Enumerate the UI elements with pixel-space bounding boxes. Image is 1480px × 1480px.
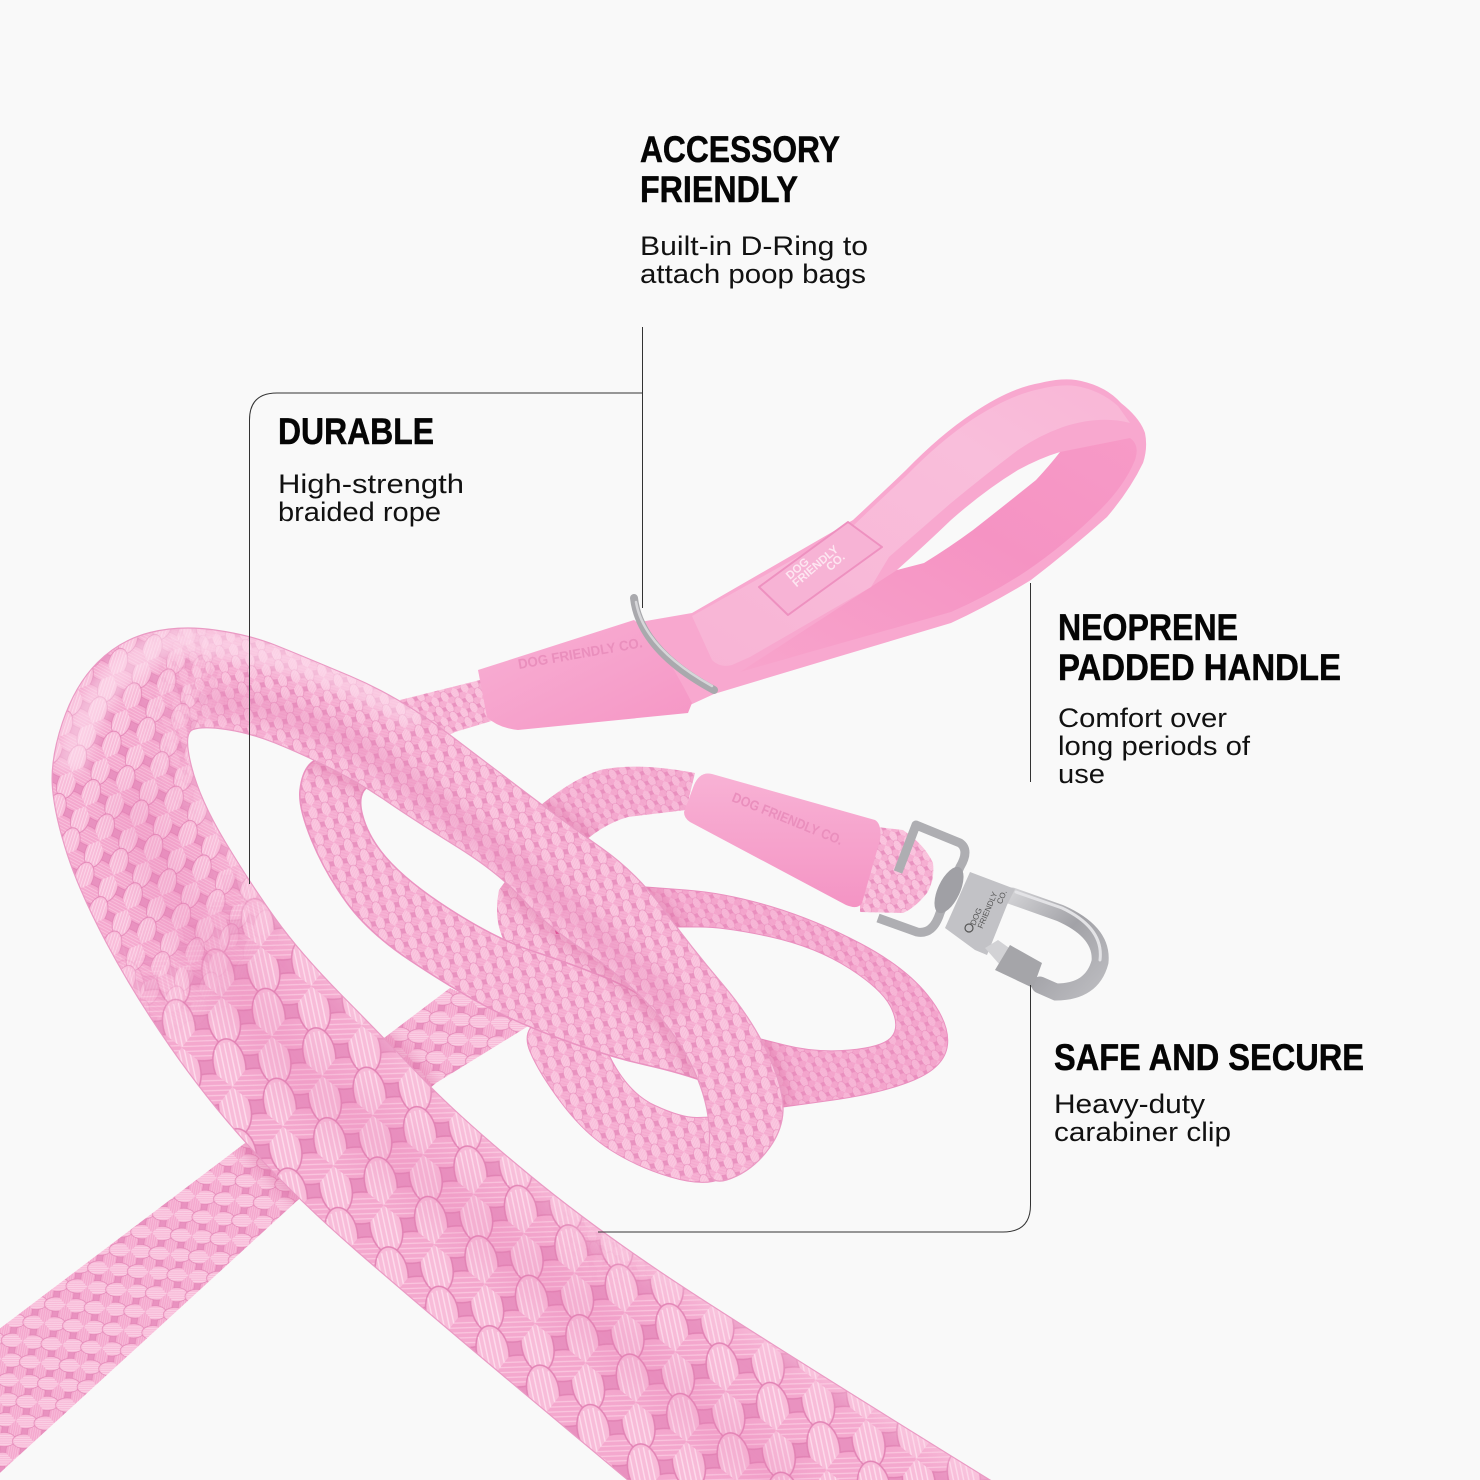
- text block: accessory friendly: [640, 129, 868, 289]
- text block: neoprene padded handle: Comfort over: [1058, 703, 1227, 733]
- collar: handle side sleeve: DOG FRIENDLY CO.: [517, 634, 644, 672]
- handle: brand patch: [759, 522, 882, 615]
- leash illustration: [0, 379, 1146, 1480]
- rope: front ring: [300, 756, 750, 1095]
- clip: swivel loop: [878, 825, 965, 932]
- rope: rear ring: [646, 887, 948, 1110]
- D-ring: [634, 598, 714, 690]
- heading: ACCESSORY: [640, 129, 840, 170]
- heading: DURABLE: [278, 411, 434, 452]
- collar: clip side sleeve: [684, 773, 880, 907]
- collar: rope end near clip: [860, 825, 933, 913]
- text block: accessory friendly: attach poop bags: [640, 259, 866, 289]
- rope: near collar: [535, 767, 695, 850]
- text block: durable: braided rope: [278, 497, 441, 527]
- clip: hook: [1012, 892, 1100, 992]
- text block: accessory friendly: Built-in D-Ring to: [640, 231, 868, 261]
- text block: neoprene padded handle: use: [1058, 759, 1105, 789]
- heading: NEOPRENE: [1058, 607, 1238, 648]
- text block: accessory friendly: FRIENDLY: [640, 169, 798, 210]
- text block: durable: High-strength: [278, 469, 464, 499]
- clip: swivel barrel: [928, 863, 970, 917]
- text block: neoprene padded handle: PADDED HANDLE: [1058, 647, 1341, 688]
- rope: handle side stub: [400, 680, 495, 745]
- handle: brand patch: CO.: [824, 551, 848, 574]
- rope: lower-left strand: [0, 988, 530, 1480]
- collar: clip side sleeve: DOG FRIENDLY CO.: [730, 789, 845, 848]
- rope: contact shadow under the main strand: [237, 761, 794, 1207]
- carabiner clip: CO.: [995, 889, 1009, 905]
- handle: lower strap: [740, 438, 1137, 672]
- rope: main thick strand: [52, 627, 991, 1480]
- clip: body: [945, 872, 1015, 955]
- handle: silhouette and rim: [640, 379, 1146, 705]
- handle: grip opening: [897, 452, 1060, 570]
- clip: lock sleeve: [995, 945, 1042, 988]
- text block: safe and secure: Heavy-duty: [1054, 1089, 1206, 1119]
- text block: safe and secure: [1054, 1037, 1364, 1147]
- rope: loop bottom: [527, 1010, 740, 1182]
- callout line: neoprene handle: [1030, 583, 1032, 782]
- heading: SAFE AND SECURE: [1054, 1037, 1364, 1078]
- collar: handle side sleeve: [478, 620, 692, 730]
- clip: pin: [985, 940, 1012, 965]
- handle: upper strap: [692, 385, 1130, 666]
- handle: brand patch: FRIENDLY: [791, 544, 841, 590]
- text block: durable: [278, 411, 464, 527]
- rope: inner dark spot: [553, 920, 575, 934]
- handle: brand patch: DOG: [784, 556, 812, 582]
- rope: inner loop: [497, 820, 650, 1020]
- carabiner clip: DOG: [969, 906, 984, 927]
- callout line: safe and secure: [598, 985, 1030, 1232]
- text block: safe and secure: carabiner clip: [1054, 1117, 1231, 1147]
- carabiner clip: FRIENDLY: [976, 890, 1000, 930]
- callout line: accessory and durable frame: [250, 327, 642, 884]
- text block: neoprene padded handle: [1058, 607, 1341, 789]
- text block: neoprene padded handle: long periods of: [1058, 731, 1251, 761]
- carabiner clip: [878, 825, 1100, 992]
